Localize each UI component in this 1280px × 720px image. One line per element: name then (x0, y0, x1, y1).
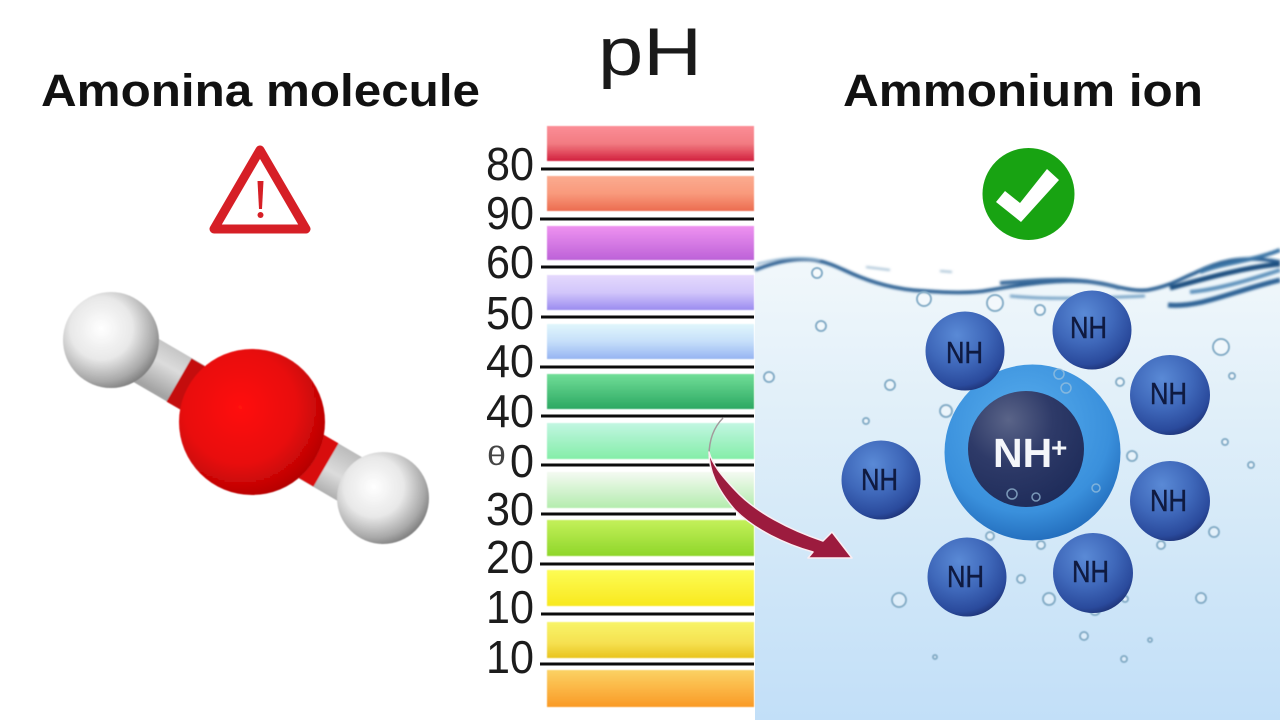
surrounding NH spheres: NH (1150, 483, 1187, 518)
icon: warning triangle (214, 150, 306, 229)
scale labels: 90 (486, 187, 534, 239)
panel: ammonium ion in water (755, 65, 1280, 720)
colour bands (547, 126, 754, 707)
scale labels: 30 (486, 483, 534, 535)
scale labels: 20 (486, 531, 534, 583)
panel: pH scale (486, 14, 754, 707)
water background (755, 255, 1280, 720)
scale labels: 40 (486, 335, 534, 387)
scale labels: 10 (486, 581, 534, 633)
surrounding NH spheres (842, 290, 1210, 616)
scale labels (486, 138, 534, 683)
panel: ammonia molecule (41, 65, 480, 544)
heading: pH: pH (598, 14, 702, 90)
heading: Ammonium ion: Ammonium ion (843, 65, 1203, 116)
surrounding NH spheres: NH (947, 559, 984, 594)
central ammonium ion: + (1051, 432, 1067, 463)
scale labels: 40 (486, 385, 534, 437)
central ammonium ion (944, 364, 1120, 540)
scale labels: 60 (486, 236, 534, 288)
scale labels: 0 (510, 435, 534, 487)
scale labels: θ (487, 441, 506, 471)
surrounding NH spheres: NH (1070, 310, 1107, 345)
scale labels: 80 (486, 138, 534, 190)
scale labels: 10 (486, 631, 534, 683)
surrounding NH spheres: NH (861, 462, 898, 497)
bubbles (764, 268, 1254, 662)
surrounding NH spheres: NH (1150, 376, 1187, 411)
heading: Amonina molecule: Amonina molecule (41, 65, 480, 116)
surrounding NH spheres: NH (946, 335, 983, 370)
central ammonium ion: NH (993, 430, 1052, 476)
arrow: from pH scale to ammonium ion (709, 418, 852, 558)
scale labels: 50 (486, 287, 534, 339)
surrounding NH spheres: NH (1072, 554, 1109, 589)
water surface wave (755, 250, 1280, 305)
icon: green check mark (982, 148, 1074, 240)
molecule: water-like ball and stick model (63, 292, 429, 544)
